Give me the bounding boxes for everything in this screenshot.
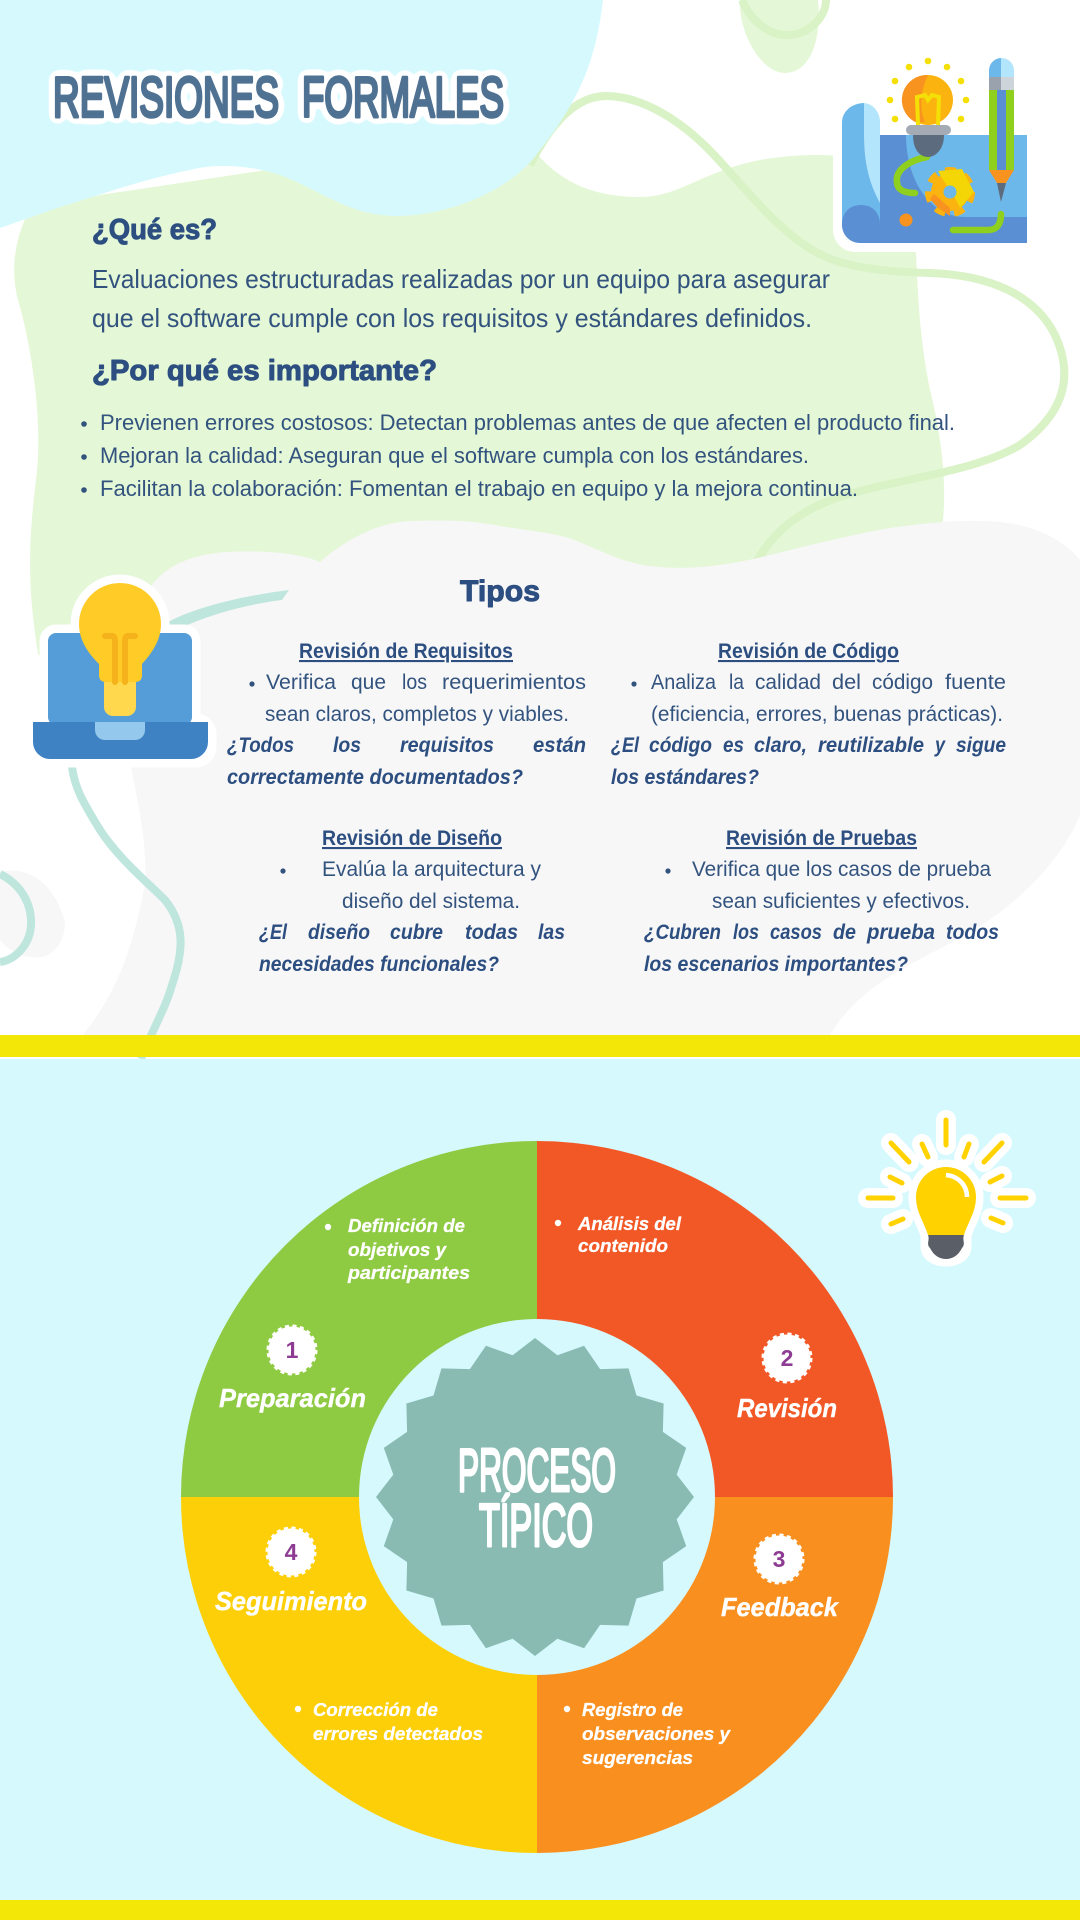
step 2 revision: Análisis del <box>577 1213 682 1234</box>
step 1 preparacion: Preparación <box>219 1383 366 1413</box>
icon: pencil <box>989 58 1014 202</box>
type: revision de codigo: código <box>872 671 933 694</box>
type: revision de requisitos: están <box>533 734 586 757</box>
step 3 feedback: 3 <box>773 1546 785 1572</box>
type: revision de codigo: la <box>729 671 744 694</box>
type: revision de diseno <box>259 827 565 976</box>
step 2 revision: Revisión <box>737 1393 837 1423</box>
type: revision de codigo: Analiza <box>651 671 716 694</box>
type: revision de requisitos: los <box>402 671 427 694</box>
type: revision de codigo: calidad <box>755 671 821 694</box>
type: revision de requisitos: requisitos <box>400 734 494 757</box>
green background blob <box>14 154 944 680</box>
title: REVISIONES <box>53 66 279 130</box>
type: revision de diseno: las <box>538 921 565 944</box>
type: revision de requisitos: correctamente documentados? <box>227 766 523 789</box>
type: revision de codigo: y <box>934 734 946 757</box>
type: revision de codigo: claro, <box>754 734 807 757</box>
step 1 preparacion: participantes <box>347 1262 470 1283</box>
type: revision de requisitos: requerimientos <box>442 671 586 694</box>
bullet list: importance: Previenen errores costosos: Detectan problemas antes de que afecten el producto final. <box>100 410 955 435</box>
bullet list: importance <box>81 410 955 501</box>
type: revision de pruebas <box>644 827 999 976</box>
type: revision de requisitos: Verifica <box>266 671 336 694</box>
green winding curve <box>530 96 1064 565</box>
icon: blueprint with bulb and pencil <box>833 58 1038 252</box>
type: revision de diseno: Evalúa la arquitectura y <box>322 858 541 881</box>
step 1 preparacion: Definición de <box>348 1215 465 1236</box>
step 2 revision: 2 <box>781 1345 793 1371</box>
type: revision de requisitos: los <box>333 734 361 757</box>
type: revision de requisitos: Revisión de Requisitos <box>299 640 513 663</box>
step 3 feedback: observaciones y <box>582 1723 732 1744</box>
icon: bulb <box>902 75 953 157</box>
heading: que es: ¿Qué es? <box>92 214 217 246</box>
type: revision de diseno: necesidades funcionales? <box>259 953 499 976</box>
type: revision de diseno: ¿El <box>259 921 288 944</box>
yellow bottom bar <box>0 1900 1080 1920</box>
paragraph: definition: Evaluaciones estructuradas realizadas por un equipo para asegurar <box>92 264 830 294</box>
bullet list: importance: Mejoran la calidad: Aseguran que el software cumpla con los estándares. <box>100 443 809 468</box>
center title: TÍPICO <box>479 1492 593 1559</box>
type: revision de pruebas: de <box>833 921 856 944</box>
heading: por que es importante: ¿Por qué es importante? <box>92 355 437 387</box>
teal curve upper <box>168 590 289 632</box>
top green loop <box>742 0 826 35</box>
step 3 feedback <box>564 1536 839 1768</box>
segment: feedback <box>537 1497 893 1853</box>
bulb glow dots <box>887 58 969 122</box>
step 3 feedback: sugerencias <box>582 1747 693 1768</box>
type: revision de codigo <box>611 640 1006 789</box>
step 4 seguimiento <box>215 1528 483 1744</box>
title: FORMALES <box>302 66 504 130</box>
type: revision de diseno: diseño <box>308 921 370 944</box>
type: revision de codigo: sigue <box>956 734 1006 757</box>
type: revision de codigo: es <box>723 734 744 757</box>
icon: laptop with bulb <box>33 583 208 759</box>
type: revision de requisitos: sean claros, completos y viables. <box>265 703 569 726</box>
step 2 revision: contenido <box>578 1235 668 1256</box>
yellow divider bar <box>0 1035 1080 1057</box>
type: revision de codigo: los estándares? <box>611 766 759 789</box>
type: revision de diseno: Revisión de Diseño <box>322 827 502 850</box>
type: revision de codigo: del <box>832 671 861 694</box>
bullet list: importance: Facilitan la colaboración: Fomentan el trabajo en equipo y la mejora continua. <box>100 476 858 501</box>
type: revision de pruebas: todos <box>946 921 999 944</box>
teal curve lower <box>72 767 181 1059</box>
step 1 preparacion <box>219 1215 470 1413</box>
center title <box>458 1437 616 1559</box>
donut hole <box>359 1319 715 1675</box>
type: revision de requisitos: ¿Todos <box>227 734 294 757</box>
type: revision de pruebas: Revisión de Pruebas <box>726 827 917 850</box>
small grey blob left <box>0 871 65 957</box>
step 1 preparacion: objetivos y <box>348 1239 448 1260</box>
step 2 revision <box>555 1213 837 1423</box>
step 4 seguimiento: Corrección de <box>313 1699 438 1720</box>
cyan top blob <box>0 0 603 228</box>
step 4 seguimiento: 4 <box>285 1539 298 1565</box>
step 4 seguimiento: Seguimiento <box>215 1586 367 1616</box>
type: revision de diseno: diseño del sistema. <box>342 890 520 913</box>
center title: PROCESO <box>458 1437 616 1504</box>
type: revision de pruebas: los escenarios importantes? <box>644 953 908 976</box>
icon: gear <box>929 169 974 216</box>
type: revision de codigo: código <box>649 734 712 757</box>
type: revision de diseno: cubre <box>390 921 443 944</box>
segment: seguimiento <box>181 1497 537 1853</box>
paragraph: definition <box>92 264 830 333</box>
step 1 preparacion: 1 <box>286 1337 299 1363</box>
donut: process cycle <box>181 1141 893 1853</box>
type: revision de codigo: (eficiencia, errores, buenas prácticas). <box>651 703 1003 726</box>
type: revision de pruebas: casos <box>770 921 822 944</box>
segment: revision <box>537 1141 893 1497</box>
paragraph: definition: que el software cumple con los requisitos y estándares definidos. <box>92 303 812 333</box>
icon: light bulb with rays <box>868 1120 1026 1259</box>
step 3 feedback: Feedback <box>721 1592 839 1622</box>
heading: tipos: Tipos <box>460 575 540 608</box>
grey background blob <box>83 521 1080 1035</box>
type: revision de pruebas: ¿Cubren <box>644 921 721 944</box>
type: revision de diseno: todas <box>465 921 518 944</box>
center starburst <box>376 1338 694 1656</box>
segment: preparacion <box>181 1141 537 1497</box>
type: revision de requisitos <box>227 640 586 789</box>
type: revision de codigo: Revisión de Código <box>718 640 899 663</box>
type: revision de pruebas: sean suficientes y efectivos. <box>712 890 970 913</box>
type: revision de pruebas: Verifica que los casos de prueba <box>692 858 991 881</box>
type: revision de codigo: fuente <box>945 671 1006 694</box>
step 3 feedback: Registro de <box>582 1699 683 1720</box>
cyan lower background <box>0 1059 1080 1900</box>
type: revision de pruebas: prueba <box>866 921 935 944</box>
type: revision de codigo: reutilizable <box>818 734 924 757</box>
type: revision de codigo: ¿El <box>611 734 640 757</box>
step 4 seguimiento: errores detectados <box>313 1723 483 1744</box>
type: revision de pruebas: los <box>733 921 759 944</box>
type: revision de requisitos: que <box>351 671 386 694</box>
teal spiral left <box>0 874 31 962</box>
top green blob <box>740 0 819 73</box>
